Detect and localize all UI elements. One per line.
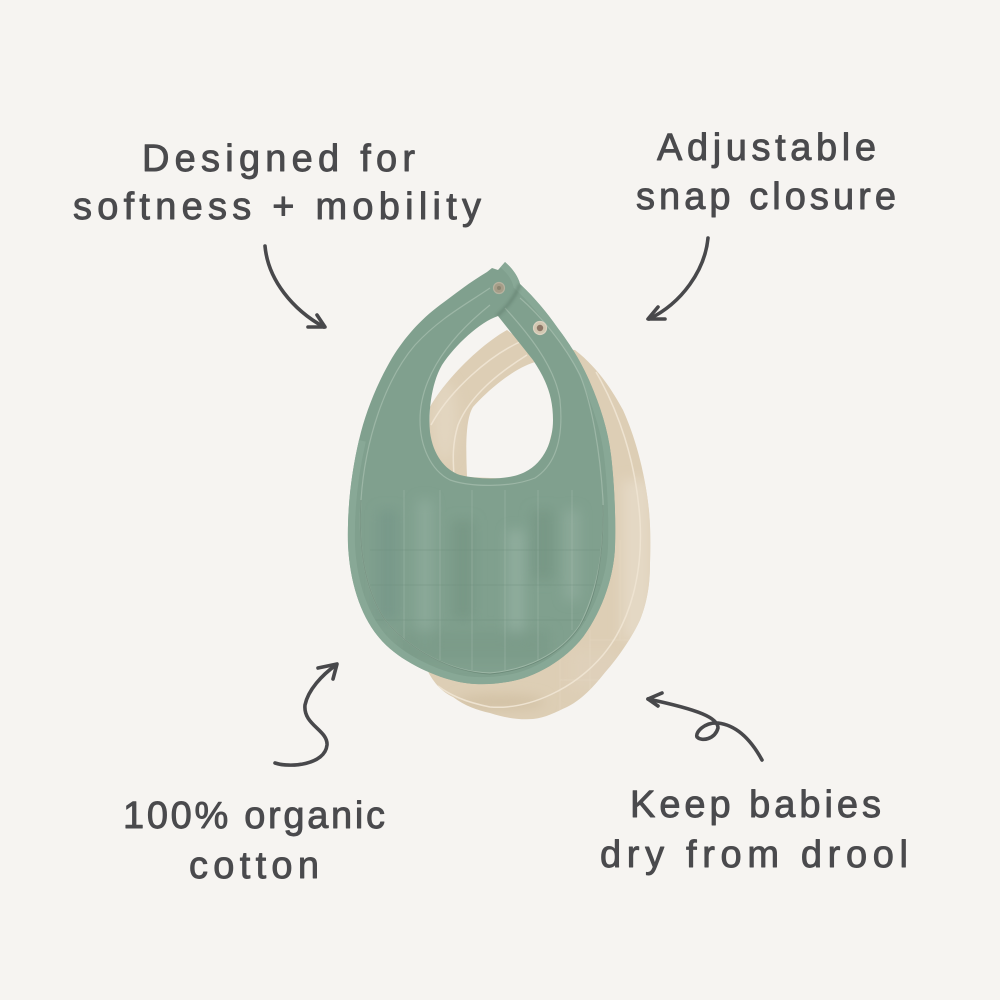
heading: adjustable snap closure: [636, 127, 896, 218]
heading: adjustable snap closure: Adjustable: [657, 127, 876, 169]
beige bib: [428, 330, 650, 720]
heading: designed for softness: [73, 138, 481, 228]
callout: organic cotton: [123, 664, 385, 887]
heading: keep babies dry: dry from drool: [600, 834, 908, 876]
callout: softness and mobility: [73, 138, 481, 327]
heading: keep babies dry: [600, 784, 908, 876]
arrow: cotton to bib: [275, 664, 337, 765]
heading: organic cotton: cotton: [189, 845, 319, 887]
green bib: [340, 255, 625, 690]
arrow: drool to bib: [648, 693, 762, 760]
green bib stitching: [360, 288, 603, 673]
beige bib grid seams: [560, 540, 640, 710]
snap button, upper strap: [494, 282, 504, 294]
heading: keep babies dry: Keep babies: [630, 784, 881, 826]
heading: designed for softness: softness + mobility: [73, 186, 481, 228]
beige bib shading: [433, 380, 652, 709]
green bib edge binding: [348, 262, 615, 684]
heading: organic cotton: [123, 795, 385, 887]
green bib grid seams: [404, 490, 572, 670]
heading: organic cotton: 100% organic: [123, 795, 385, 837]
arrow: snap closure to bib: [648, 238, 708, 319]
strap fold shadow: [497, 284, 520, 316]
snap button, lower strap: [534, 322, 546, 334]
heading: designed for softness: Designed for: [142, 138, 415, 180]
heading: adjustable snap closure: snap closure: [636, 176, 896, 218]
callout: snap closure: [636, 127, 896, 319]
green bib mottling: [421, 506, 577, 628]
callout: dry from drool: [600, 693, 908, 876]
beige bib stitching: [431, 341, 640, 707]
product photo: two muslin bibs: [340, 255, 660, 730]
arrow: softness to bib: [265, 246, 325, 327]
